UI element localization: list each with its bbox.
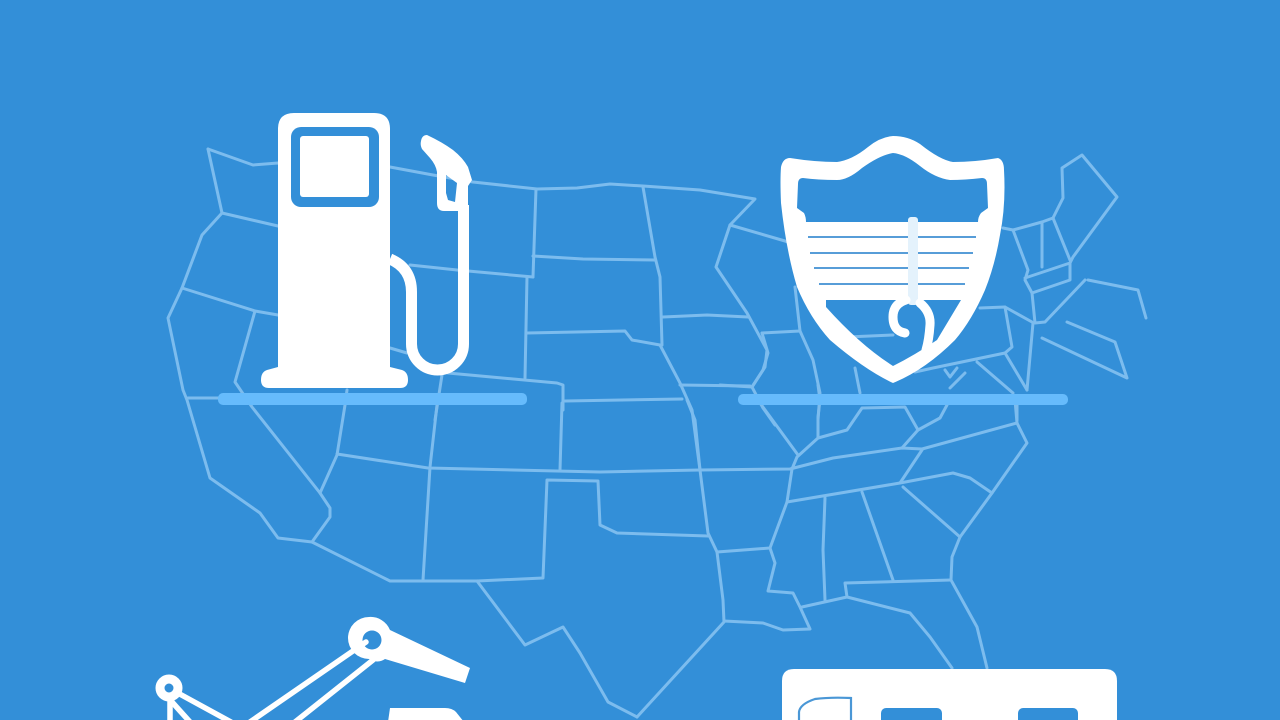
pump screen	[300, 136, 369, 197]
pump screen frame	[291, 127, 379, 207]
icon: crane arm	[160, 617, 470, 720]
pump body	[261, 113, 408, 388]
crane boom head	[348, 617, 470, 683]
crane small joint	[160, 679, 178, 697]
shield top panel	[797, 153, 988, 222]
icon: shield with slats	[780, 136, 1004, 383]
fuel hose	[390, 205, 464, 370]
icon: truck panel	[782, 669, 1117, 720]
shield outline and band	[780, 136, 1004, 383]
shield centre rod	[908, 217, 918, 305]
shelf bar left	[218, 393, 527, 405]
icon: fuel pump	[261, 113, 472, 388]
crane struts	[170, 642, 373, 720]
truck body	[782, 669, 1117, 720]
fuel nozzle	[421, 135, 472, 211]
truck cab outline	[799, 698, 851, 720]
truck window right	[1018, 708, 1078, 720]
shield hook	[893, 300, 930, 350]
shield slat lines	[808, 237, 976, 284]
crane base block	[388, 708, 464, 720]
truck window left	[881, 708, 942, 720]
shelf bar right	[738, 394, 1068, 405]
map: United States state outlines	[168, 149, 1146, 717]
